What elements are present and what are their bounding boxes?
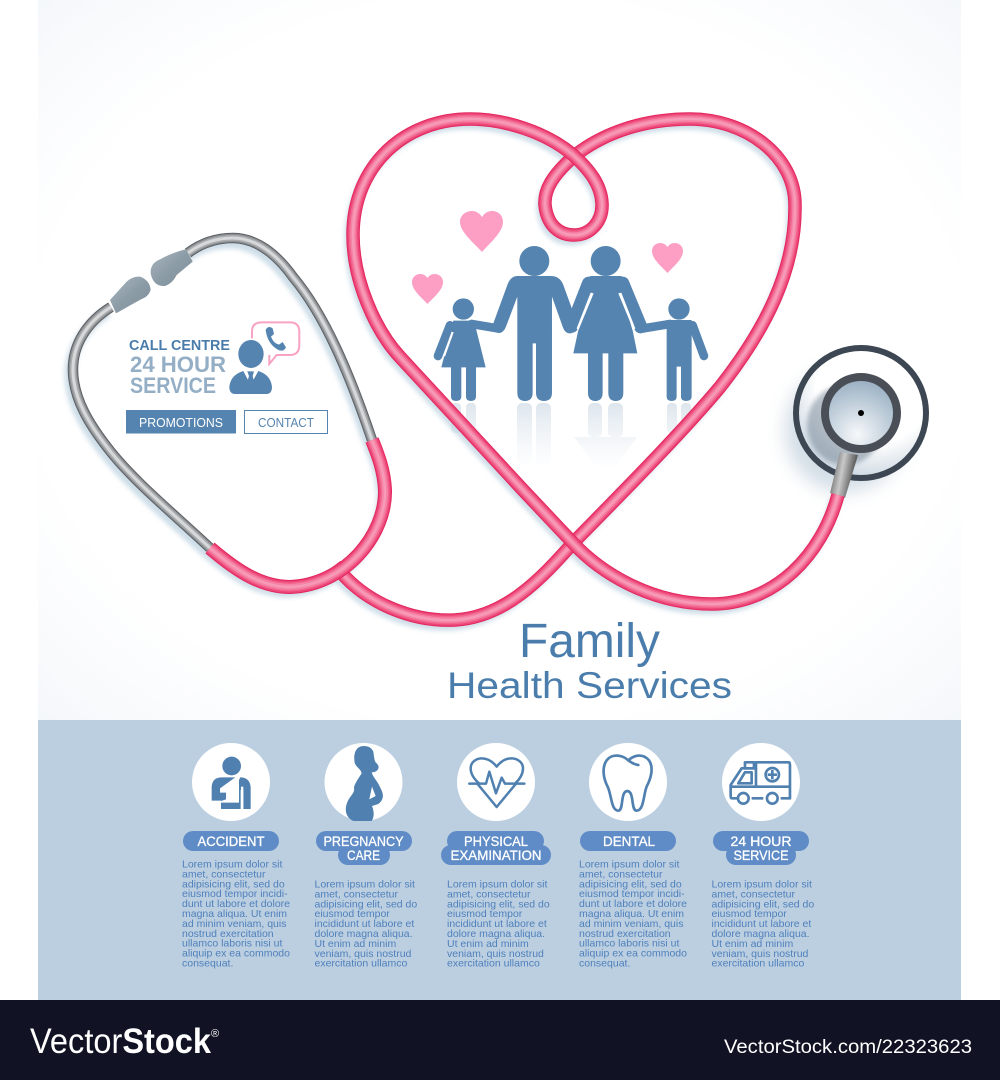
- description: nostrud exercitation: [182, 928, 274, 940]
- description: dunt ut labore et dolore: [182, 898, 290, 910]
- description: dunt ut labore et dolore: [579, 898, 687, 910]
- description: amet, consectetur: [579, 868, 663, 880]
- inner shadow on plate: [807, 385, 883, 465]
- description: ullamco laboris nisi ut: [579, 938, 679, 950]
- icon: agent with phone bubble: [229, 322, 299, 394]
- description: eiusmod tempor: [712, 908, 787, 920]
- grey right tube: [188, 238, 372, 440]
- description: dolore magna aliqua.: [314, 928, 413, 940]
- description: magna aliqua. Ut enim: [182, 908, 287, 920]
- description: Ut enim ad minim: [712, 938, 793, 950]
- description: exercitation ullamco: [447, 958, 540, 970]
- description: Ut enim ad minim: [447, 938, 529, 950]
- description: [712, 878, 814, 970]
- promotions button: [126, 410, 236, 434]
- description: [314, 878, 417, 970]
- description: [579, 858, 687, 970]
- girl: [438, 298, 499, 401]
- description: dolore magna aliqua.: [712, 928, 810, 940]
- footer bar: [0, 1000, 1000, 1080]
- outer plate ring: [796, 348, 926, 478]
- mother: [572, 246, 641, 401]
- stethoscope binaural tubes and ear tips: [73, 238, 385, 587]
- family pictogram: [438, 246, 704, 401]
- description: ad minim veniam, quis: [182, 918, 286, 930]
- title: [447, 615, 732, 706]
- page background panel: [38, 0, 961, 720]
- description: aliquip ex ea commodo: [579, 948, 687, 960]
- description: dolore magna aliqua.: [447, 928, 545, 940]
- service: 24 hour service: [712, 743, 814, 970]
- label pill: EXAMINATION: [450, 848, 542, 863]
- contact button: [244, 410, 328, 434]
- service: physical examination: [441, 743, 551, 970]
- icon: ambulance: [722, 743, 800, 821]
- ear tips: [110, 249, 193, 313]
- description: eiusmod tempor incidi-: [579, 888, 685, 900]
- label pill: SERVICE: [734, 848, 788, 863]
- label pill: ACCIDENT: [198, 834, 264, 849]
- chest piece shadow: [785, 368, 905, 492]
- description: eiusmod tempor incidi-: [182, 888, 288, 900]
- label pill: PHYSICAL: [464, 834, 528, 849]
- description: exercitation ullamco: [314, 958, 407, 970]
- description: amet, consectetur: [182, 868, 266, 880]
- contact button: CONTACT: [258, 416, 314, 430]
- center dot: [858, 410, 864, 416]
- description: Lorem ipsum dolor sit: [182, 858, 282, 870]
- description: [182, 858, 290, 970]
- description: incididunt ut labore et: [314, 918, 414, 930]
- description: Lorem ipsum dolor sit: [712, 878, 812, 890]
- description: Ut enim ad minim: [314, 938, 396, 950]
- label pill: [441, 831, 551, 865]
- reflection of family: [451, 403, 691, 480]
- small left heart: [412, 274, 443, 304]
- description: exercitation ullamco: [712, 958, 804, 970]
- stethoscope tube shadow: [70, 124, 835, 625]
- description: consequat.: [579, 958, 630, 970]
- service: pregnancy care: [314, 743, 417, 970]
- call centre heading: CALL CENTRE: [129, 338, 230, 354]
- pink heart tube, over strand to chest piece: [353, 119, 838, 604]
- description: adipisicing elit, sed do: [314, 898, 417, 910]
- description: incididunt ut labore et: [447, 918, 547, 930]
- bell ring: [825, 377, 897, 449]
- description: ad minim veniam, quis: [579, 918, 683, 930]
- title: Health Services: [447, 665, 732, 706]
- small right heart: [652, 243, 683, 273]
- label pill: CARE: [347, 848, 380, 863]
- description: amet, consectetur: [712, 888, 795, 900]
- label pill: DENTAL: [603, 834, 655, 849]
- description: adipisicing elit, sed do: [447, 898, 550, 910]
- bottom services panel background: [38, 720, 961, 1000]
- description: eiusmod tempor: [447, 908, 523, 920]
- metal neck: [830, 452, 858, 498]
- description: aliquip ex ea commodo: [182, 948, 290, 960]
- footer registered mark: ®: [211, 1028, 219, 1040]
- description: amet, consectetur: [447, 888, 531, 900]
- father: [492, 246, 577, 401]
- description: veniam, quis nostrud: [712, 948, 809, 960]
- pink lower loop of stethoscope: [210, 440, 385, 587]
- boy: [642, 298, 704, 401]
- description: magna aliqua. Ut enim: [579, 908, 684, 920]
- 24 hour service text: SERVICE: [130, 373, 216, 398]
- large heart: [460, 211, 503, 252]
- icon: heart with pulse: [457, 743, 535, 821]
- grey left tube: [73, 307, 210, 548]
- description: Lorem ipsum dolor sit: [314, 878, 415, 890]
- 24 hour service text: 24 HOUR: [130, 352, 226, 377]
- description: amet, consectetur: [314, 888, 398, 900]
- service: dental: [579, 743, 687, 970]
- 24 hour service text: [130, 352, 226, 398]
- description: eiusmod tempor: [314, 908, 390, 920]
- service: accident: [182, 743, 290, 970]
- description: consequat.: [182, 958, 233, 970]
- label pill: [316, 831, 412, 865]
- description: Lorem ipsum dolor sit: [447, 878, 547, 890]
- description: veniam, quis nostrud: [447, 948, 544, 960]
- promotions button: PROMOTIONS: [139, 416, 223, 430]
- pink heart tube, under strand: [335, 119, 795, 620]
- icon: pregnant woman: [324, 743, 402, 821]
- description: ullamco laboris nisi ut: [182, 938, 282, 950]
- description: adipisicing elit, sed do: [182, 878, 285, 890]
- description: incididunt ut labore et: [712, 918, 811, 930]
- description: adipisicing elit, sed do: [579, 878, 682, 890]
- title: Family: [519, 615, 660, 668]
- description: [447, 878, 550, 970]
- icon: tooth: [589, 743, 667, 821]
- description: veniam, quis nostrud: [314, 948, 412, 960]
- stethoscope chest piece: [785, 348, 926, 498]
- call centre block: [126, 322, 328, 434]
- description: nostrud exercitation: [579, 928, 671, 940]
- pink hearts: [412, 211, 683, 304]
- icon: arm in sling: [192, 743, 270, 821]
- label pill: [580, 831, 676, 851]
- description: Lorem ipsum dolor sit: [579, 858, 679, 870]
- label pill: PREGNANCY: [324, 834, 404, 849]
- label pill: 24 HOUR: [730, 834, 792, 849]
- footer logo: VectorStock: [30, 1022, 211, 1061]
- label pill: [713, 831, 809, 865]
- label pill: [183, 831, 279, 851]
- footer image id: VectorStock.com/22323623: [724, 1037, 972, 1058]
- description: adipisicing elit, sed do: [712, 898, 814, 910]
